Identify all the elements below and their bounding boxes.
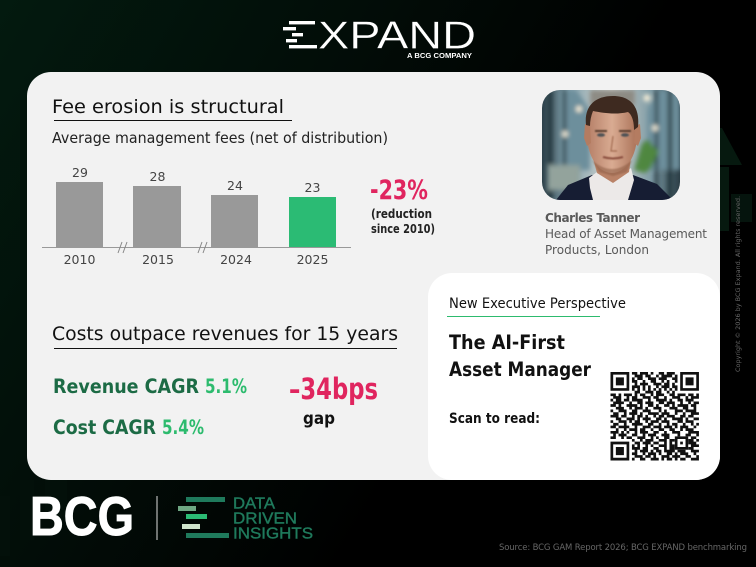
panel: main card xyxy=(27,72,720,480)
cost CAGR: 5.4% xyxy=(162,416,204,439)
hair xyxy=(586,96,638,130)
logo tagline: A BCG COMPANY xyxy=(407,53,472,60)
neck xyxy=(593,158,631,183)
bar chart: 2010 xyxy=(64,252,95,267)
logo: EXPAND xyxy=(283,14,476,60)
speaker role: Products, London xyxy=(545,243,649,257)
callout: -23% xyxy=(370,175,435,236)
logo text: DRIVEN xyxy=(233,510,297,528)
report title: The AI-First xyxy=(449,331,565,354)
logo wordmark: XPAND xyxy=(318,14,476,57)
speaker role xyxy=(545,227,707,257)
bar chart: 24 xyxy=(227,178,243,193)
bar chart: 2015 xyxy=(142,252,174,267)
logo bars xyxy=(283,21,317,48)
copyright note: Copyright © 2026 by BCG Expand. All rights reserved. xyxy=(734,196,742,372)
panel: costs outpace revenues xyxy=(52,323,398,439)
logo: data driven insights xyxy=(178,496,313,542)
logo text: DATA xyxy=(233,496,275,512)
callout: -23%: -23% xyxy=(370,175,428,206)
report title: Asset Manager xyxy=(449,358,591,381)
panel: speaker xyxy=(542,90,707,257)
speaker role: Head of Asset Management xyxy=(545,227,707,241)
bar chart: 23 xyxy=(305,180,320,195)
heading: costs: Costs outpace revenues for 15 years xyxy=(52,323,398,345)
callout: gap: gap xyxy=(303,409,335,428)
face xyxy=(588,111,636,173)
panel heading: New Executive Perspective xyxy=(449,296,626,312)
subtitle: Average management fees (net of distribution) xyxy=(52,129,388,147)
bar chart: 28 xyxy=(150,169,165,184)
bar chart: 2025 xyxy=(297,252,328,267)
cost CAGR: Cost CAGR xyxy=(53,416,156,439)
bar chart: 2024 xyxy=(220,252,252,267)
bar chart xyxy=(42,165,351,267)
callout: gap xyxy=(289,372,378,428)
jacket xyxy=(556,175,673,200)
bar chart: 29 xyxy=(72,165,88,180)
source note: Source: BCG GAM Report 2026; BCG EXPAND benchmarking xyxy=(499,543,747,553)
photo xyxy=(542,90,680,200)
panel: executive perspective xyxy=(428,273,720,480)
logo: BCG: BCG xyxy=(30,485,134,547)
logo text xyxy=(233,496,313,542)
QR code xyxy=(610,372,699,460)
callout: gap: –34bps xyxy=(289,372,378,406)
callout: -23%: (reduction xyxy=(371,206,432,221)
speaker name: Charles Tanner xyxy=(545,211,640,225)
scan label: Scan to read: xyxy=(449,411,540,427)
report title xyxy=(449,331,591,381)
revenue CAGR: Revenue CAGR xyxy=(53,375,199,398)
revenue CAGR: 5.1% xyxy=(205,375,247,398)
heading: fee erosion: Fee erosion is structural xyxy=(52,96,284,118)
shirt xyxy=(589,168,634,200)
logo text: INSIGHTS xyxy=(233,526,313,542)
logo bars xyxy=(178,497,229,538)
panel: fee erosion xyxy=(42,96,435,267)
callout: -23%: since 2010) xyxy=(371,221,435,236)
